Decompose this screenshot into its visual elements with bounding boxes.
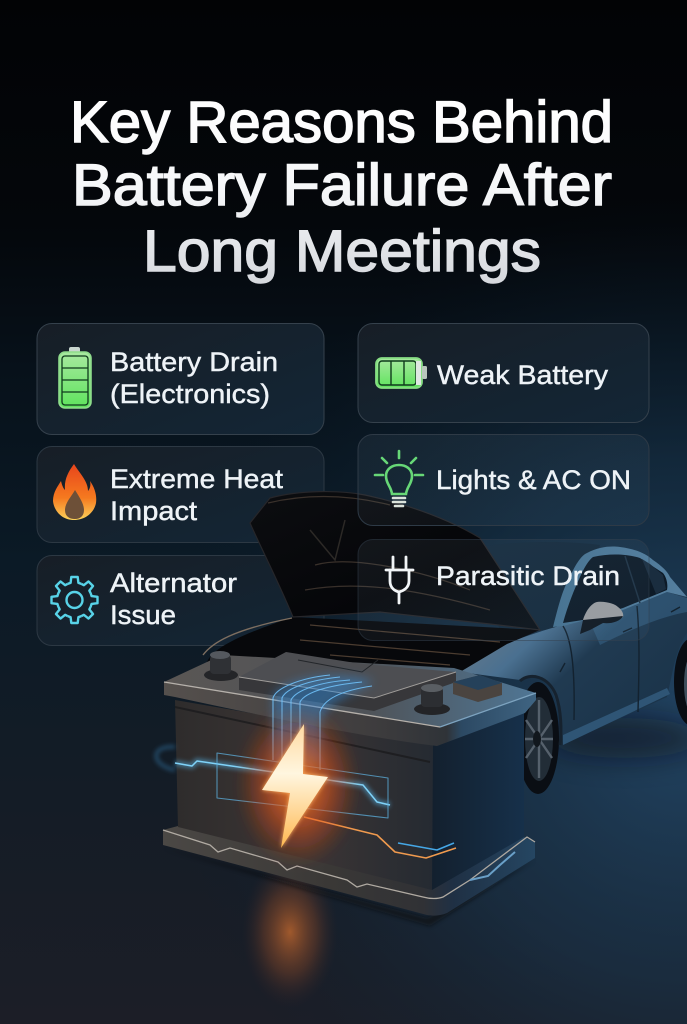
- side mirror: [580, 602, 623, 634]
- icon: battery horizontal: [376, 358, 427, 388]
- label: Battery Drain: [110, 347, 278, 377]
- blue energy stream: [273, 675, 374, 770]
- icon: battery vertical: [59, 347, 91, 408]
- panel: lights and AC: [358, 434, 649, 526]
- panel: weak battery: [358, 324, 649, 422]
- panel: parasitic drain: [358, 540, 649, 640]
- title: [70, 90, 613, 284]
- terminal right: [414, 684, 450, 715]
- icon: flame: [53, 464, 96, 520]
- label: Weak Battery: [437, 360, 609, 390]
- panel: battery drain: [37, 324, 324, 434]
- icon: gear: [52, 577, 98, 623]
- rear wheel: [674, 638, 687, 726]
- battery right face: [432, 708, 524, 890]
- label: (Electronics): [110, 379, 270, 409]
- lightning bolt: [236, 703, 360, 867]
- sill highlight: [563, 688, 670, 745]
- label: Parasitic Drain: [436, 561, 620, 591]
- car with open hood: [203, 492, 687, 794]
- label: [110, 464, 284, 526]
- engine bay: [203, 617, 540, 672]
- battery left face: [175, 700, 437, 890]
- label: Extreme Heat: [110, 464, 284, 494]
- window frame: [553, 547, 687, 627]
- car body: [460, 590, 687, 744]
- upper body highlight: [590, 592, 687, 645]
- open hood: [250, 492, 540, 630]
- circuit lines: [156, 747, 456, 858]
- panel: alternator issue: [37, 556, 324, 646]
- terminal cap: [453, 675, 502, 702]
- label: Lights & AC ON: [436, 465, 631, 495]
- panel: extreme heat: [37, 446, 324, 542]
- terminal left: [204, 651, 238, 681]
- icon: plug: [386, 557, 413, 603]
- battery lid: [164, 655, 536, 762]
- title: Battery Failure After: [72, 153, 612, 218]
- label: Alternator: [110, 568, 237, 598]
- title: Key Reasons Behind: [70, 90, 613, 155]
- label: Impact: [110, 496, 198, 526]
- floor reflection: [163, 848, 535, 1008]
- label: [110, 347, 278, 409]
- raised top pad: [239, 652, 456, 711]
- label: Issue: [110, 600, 176, 630]
- title: Long Meetings: [143, 219, 541, 284]
- label: [110, 568, 237, 630]
- battery base: [163, 826, 535, 916]
- dim roof behind hood: [470, 542, 600, 630]
- side windows: [563, 554, 667, 623]
- icon: light bulb: [375, 451, 423, 506]
- front wheel: [517, 676, 561, 794]
- shadow under car: [545, 718, 687, 758]
- door lines: [560, 606, 680, 720]
- battery: [156, 651, 536, 916]
